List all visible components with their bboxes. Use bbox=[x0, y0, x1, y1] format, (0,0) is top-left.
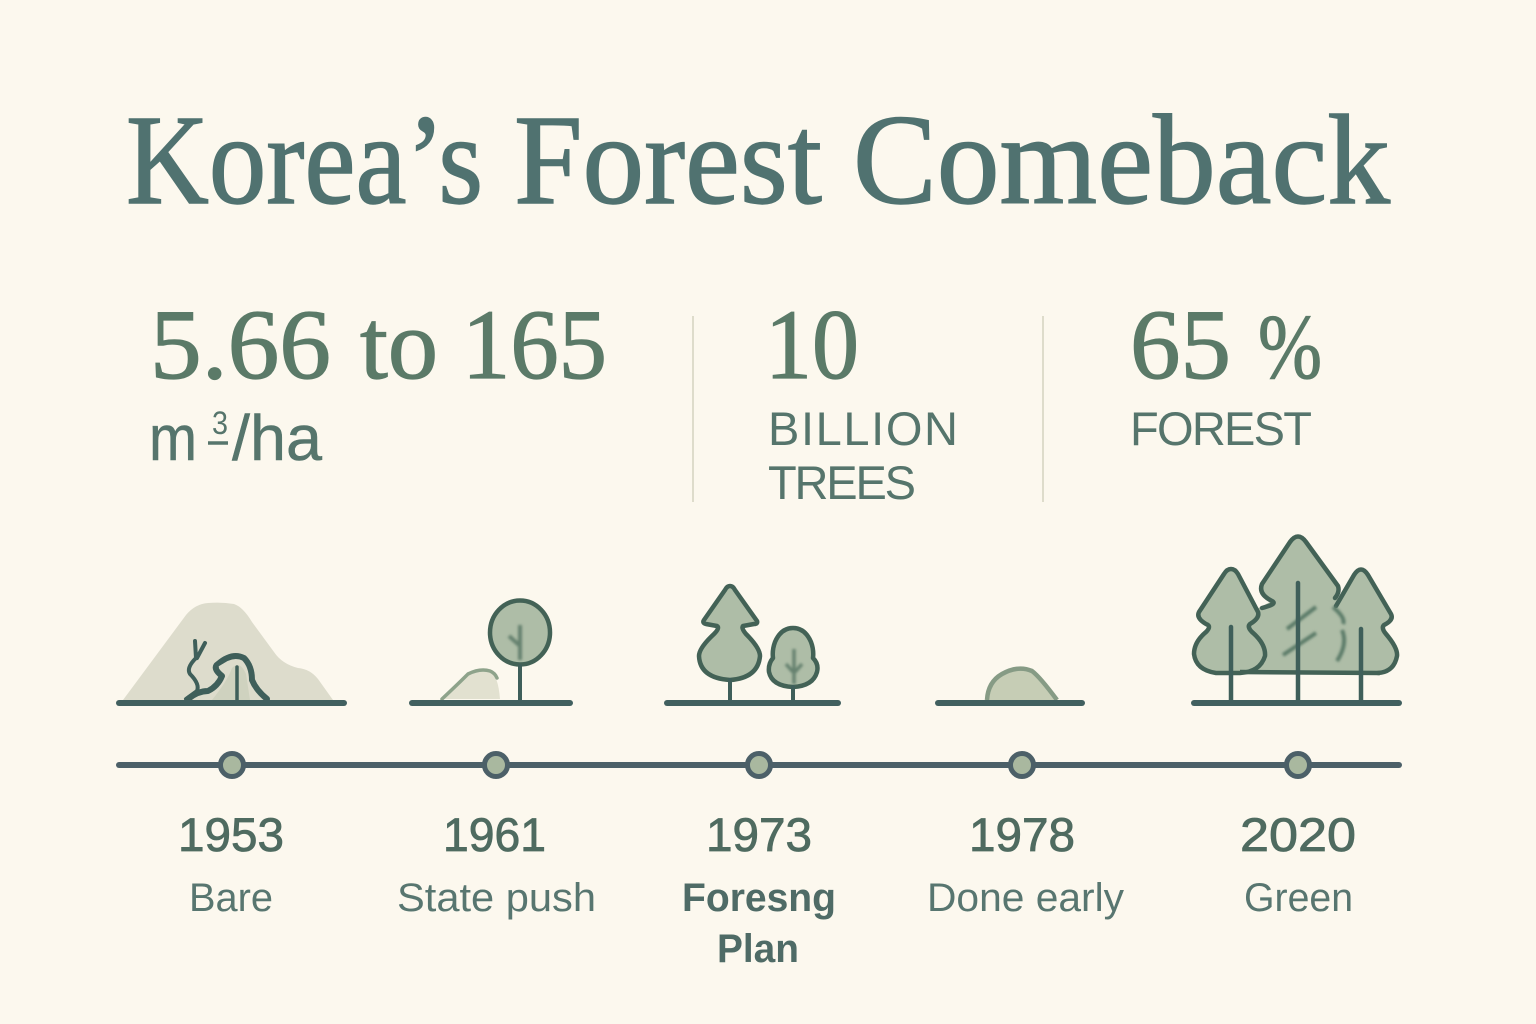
stat: forest cover: 65 bbox=[1130, 289, 1231, 400]
stat: timber volume: to bbox=[360, 289, 438, 400]
stat: trees planted: TREES bbox=[768, 456, 916, 509]
milestone: 1978 bbox=[927, 808, 1124, 920]
milestone: 2020 bbox=[1240, 808, 1356, 920]
milestone: 1973: Plan bbox=[717, 927, 799, 971]
milestone: 1961 bbox=[397, 808, 596, 920]
icon: 2020 mature forest bbox=[1194, 536, 1399, 703]
stat: forest cover bbox=[1130, 289, 1322, 455]
stat: trees planted: 10 bbox=[765, 289, 859, 400]
stat: trees planted bbox=[765, 289, 958, 509]
title bbox=[126, 89, 1390, 231]
milestone: 1961: 1961 bbox=[443, 808, 546, 861]
stat: timber volume: m bbox=[149, 402, 197, 474]
stat: timber volume: /ha bbox=[232, 402, 322, 474]
milestone: 1973: 1973 bbox=[706, 808, 812, 861]
milestone: 1978: Done early bbox=[927, 876, 1124, 920]
stat: forest cover: % bbox=[1258, 296, 1322, 398]
milestone: 1953 bbox=[178, 808, 284, 920]
stat: timber volume: 165 bbox=[462, 289, 607, 400]
milestone: 1953: 1953 bbox=[178, 808, 284, 861]
title: Korea’s bbox=[126, 89, 483, 231]
milestone: 1961: State push bbox=[397, 876, 596, 920]
milestone: 1953: Bare bbox=[189, 876, 273, 920]
stat: timber volume: 5.66 bbox=[150, 289, 331, 400]
icon: 1953 bare mountain with dead tree bbox=[119, 603, 344, 703]
title: Forest bbox=[514, 89, 822, 231]
stat: timber volume bbox=[149, 289, 607, 474]
icon: 1961 sapling and hill bbox=[412, 600, 570, 703]
milestone: 1973 bbox=[682, 808, 836, 971]
milestone: 1973: Foresng bbox=[682, 876, 836, 920]
milestone: 2020: 2020 bbox=[1240, 808, 1356, 861]
milestone: 2020: Green bbox=[1244, 876, 1353, 920]
stat: forest cover: FOREST bbox=[1130, 402, 1312, 455]
stat: timber volume: 3 bbox=[212, 405, 228, 441]
milestone: 1978: 1978 bbox=[969, 808, 1075, 861]
icon: 1978 green hill bbox=[938, 669, 1082, 703]
title: Comeback bbox=[853, 89, 1390, 231]
timeline axis bbox=[119, 754, 1399, 776]
icon: 1973 two young trees bbox=[667, 586, 838, 703]
stat: trees planted: BILLION bbox=[768, 402, 958, 455]
